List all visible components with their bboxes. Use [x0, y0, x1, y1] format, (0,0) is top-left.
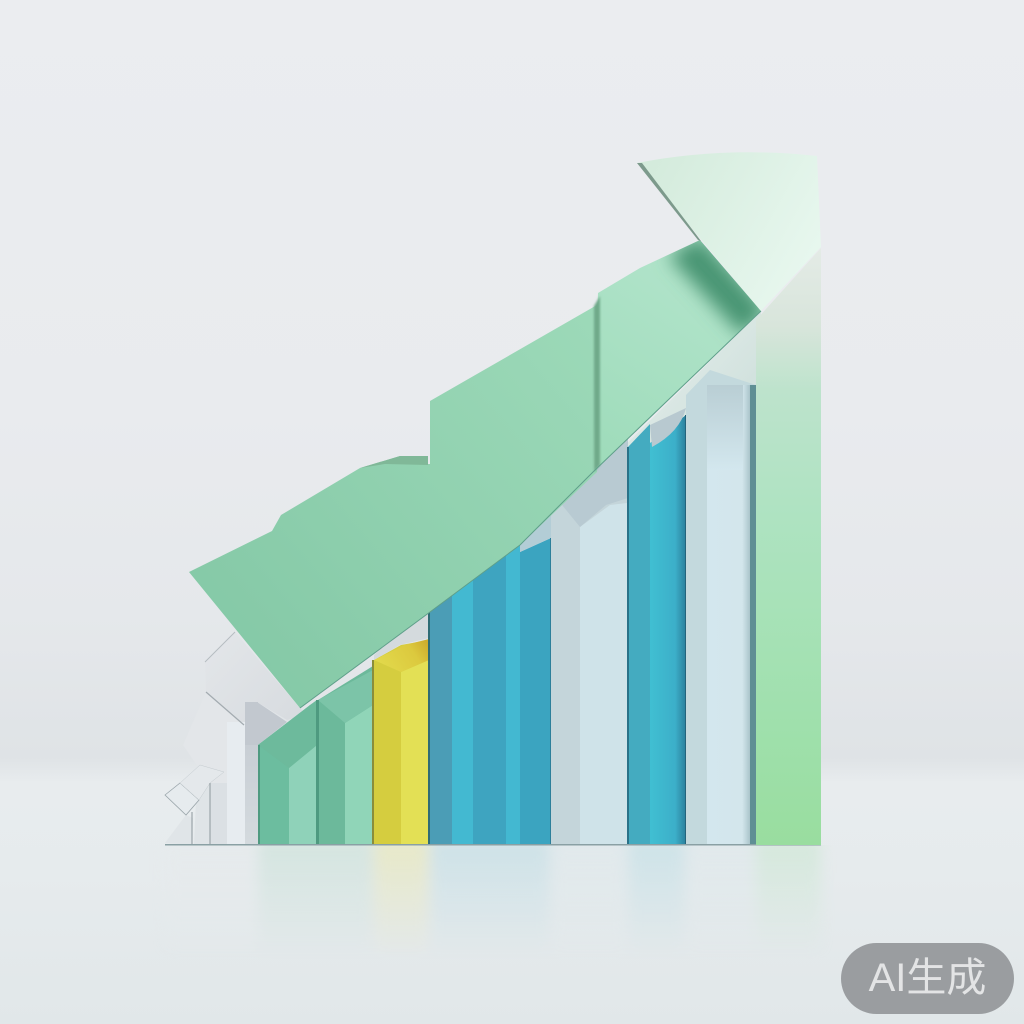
shadow under arrow head — [668, 236, 768, 336]
floor reflection of bars — [258, 846, 821, 934]
arrow head edge — [637, 163, 701, 241]
arrow body: back fold — [360, 456, 428, 468]
badge: AI生成 — [841, 943, 1014, 1014]
bar: yellow — [372, 639, 429, 845]
bar: green 1 — [258, 700, 317, 845]
badge: AI生成: AI生成 — [869, 956, 986, 1000]
arrow body: lower segment — [189, 305, 597, 708]
pale backing behind tall bars — [600, 311, 761, 470]
arrow lower edge line — [300, 311, 761, 708]
pale white stepped bars on left — [165, 632, 307, 845]
bar: green 2 — [316, 666, 373, 845]
growth chart scene — [0, 152, 1024, 943]
right green column — [756, 248, 821, 845]
arrow body: upper segment — [593, 236, 768, 472]
bar: blue 1 — [428, 575, 473, 845]
pale gap above yellow bar — [374, 605, 429, 660]
bar base line — [165, 844, 821, 846]
fold shadow — [594, 296, 600, 472]
bar: pale blue tall — [686, 370, 756, 845]
bar: blue 2 — [473, 505, 552, 845]
bar: blue 3 — [627, 408, 687, 845]
bar: pale blue middle — [551, 425, 628, 845]
arrow head — [637, 152, 821, 311]
